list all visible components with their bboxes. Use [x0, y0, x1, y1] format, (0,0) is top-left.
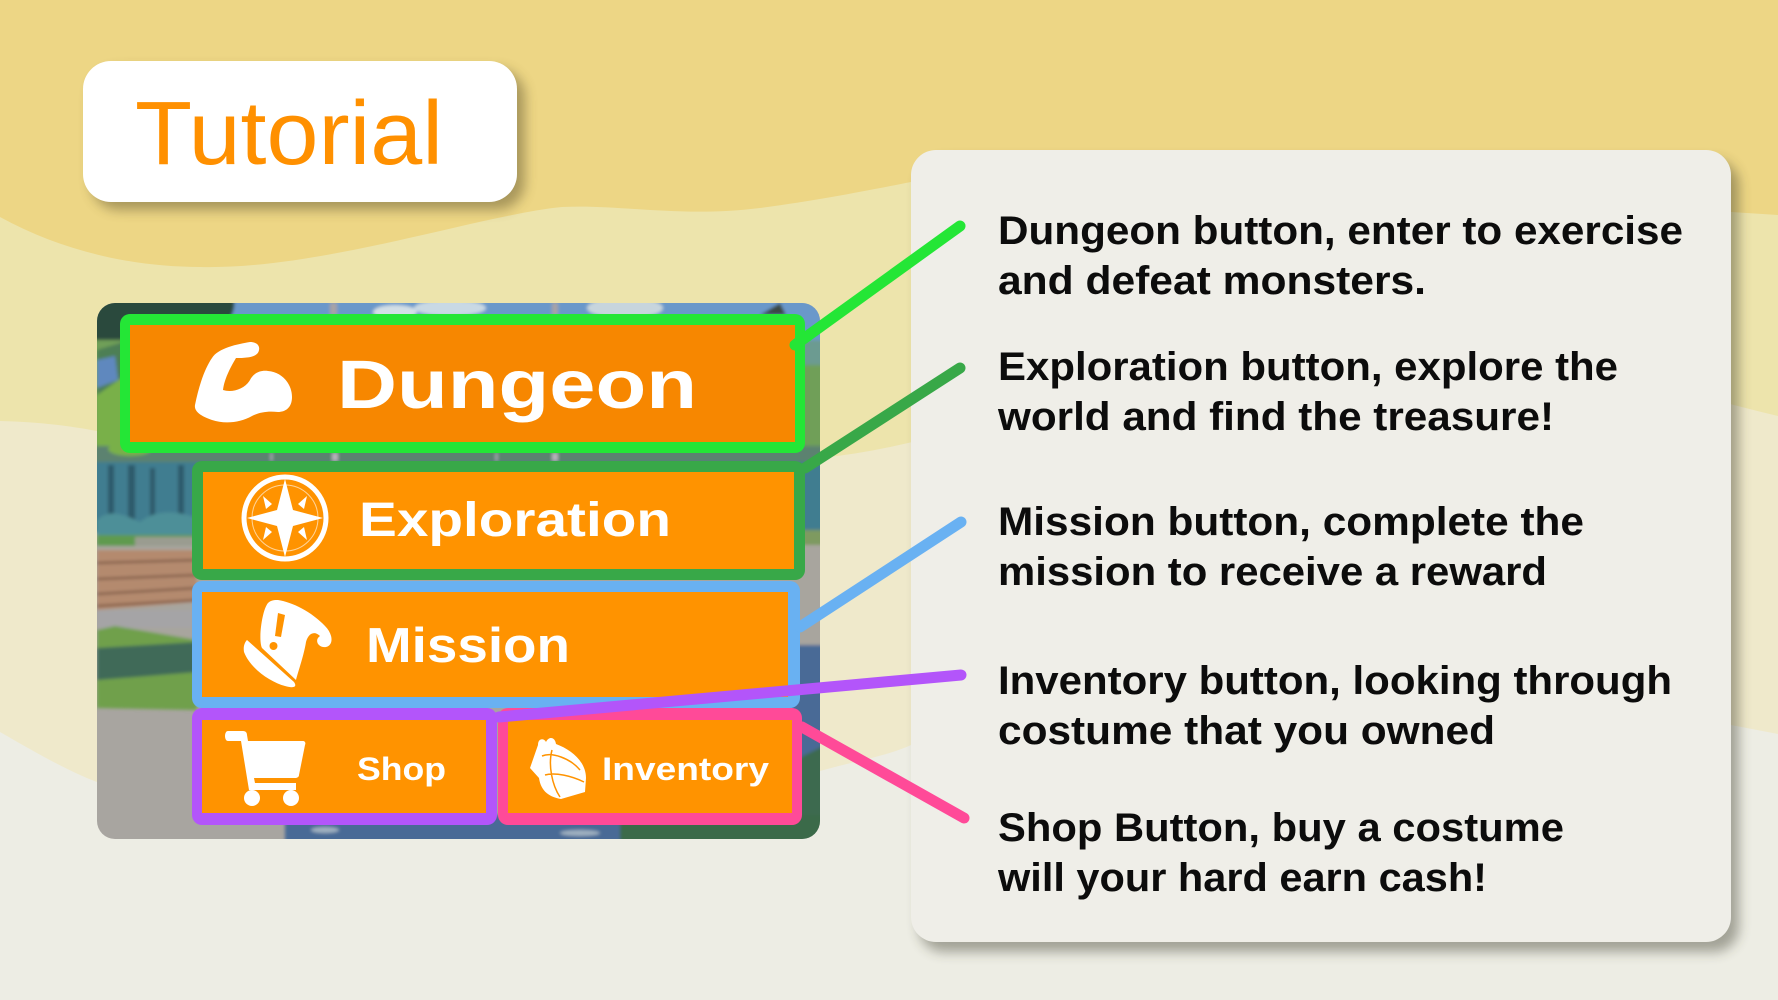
text: shop description — [997, 806, 1564, 900]
label: Mission: Mission — [366, 619, 570, 673]
icon: shopping cart — [225, 731, 305, 806]
button: exploration — [192, 461, 805, 580]
panel: descriptions background — [911, 150, 1739, 952]
label: Inventory: Inventory — [602, 751, 769, 787]
text: inventory description: Inventory button, looking through — [998, 659, 1672, 703]
text: inventory description — [998, 659, 1672, 753]
text: exploration description — [997, 345, 1618, 439]
text: inventory description: costume that you owned — [998, 709, 1495, 753]
arrow: mission line — [800, 522, 961, 627]
text: dungeon description: and defeat monsters. — [998, 259, 1426, 303]
icon: backpack — [530, 738, 586, 799]
label: Exploration: Exploration — [359, 494, 671, 547]
label: Dungeon: Dungeon — [337, 346, 697, 423]
text: exploration description: Exploration button, explore the — [998, 345, 1618, 389]
arrow: inventory purple line — [499, 675, 961, 717]
text: shop description: Shop Button, buy a costume — [998, 806, 1564, 850]
icon: scroll with exclamation mark — [244, 600, 332, 687]
arrow: shop-inventory pink line — [802, 727, 964, 818]
title card — [83, 61, 525, 210]
text: mission description — [998, 500, 1584, 594]
arrow: dungeon line — [795, 226, 960, 345]
button: shop — [192, 708, 497, 825]
text: mission description: mission to receive a reward — [998, 550, 1547, 594]
text: shop description: will your hard earn cash! — [997, 856, 1487, 900]
photo background of game scene — [90, 295, 830, 845]
button: dungeon — [120, 314, 805, 453]
icon: compass — [244, 477, 326, 559]
button: mission — [192, 581, 800, 708]
button: inventory — [498, 708, 802, 825]
text: dungeon description — [998, 209, 1683, 303]
label: Shop: Shop — [357, 751, 446, 787]
icon: flexed bicep — [195, 342, 292, 422]
text: mission description: Mission button, complete the — [998, 500, 1584, 544]
arrow: exploration line — [805, 368, 960, 468]
text: exploration description: world and find the treasure! — [997, 395, 1554, 439]
text: dungeon description: Dungeon button, enter to exercise — [998, 209, 1683, 253]
title: Tutorial — [135, 84, 443, 184]
